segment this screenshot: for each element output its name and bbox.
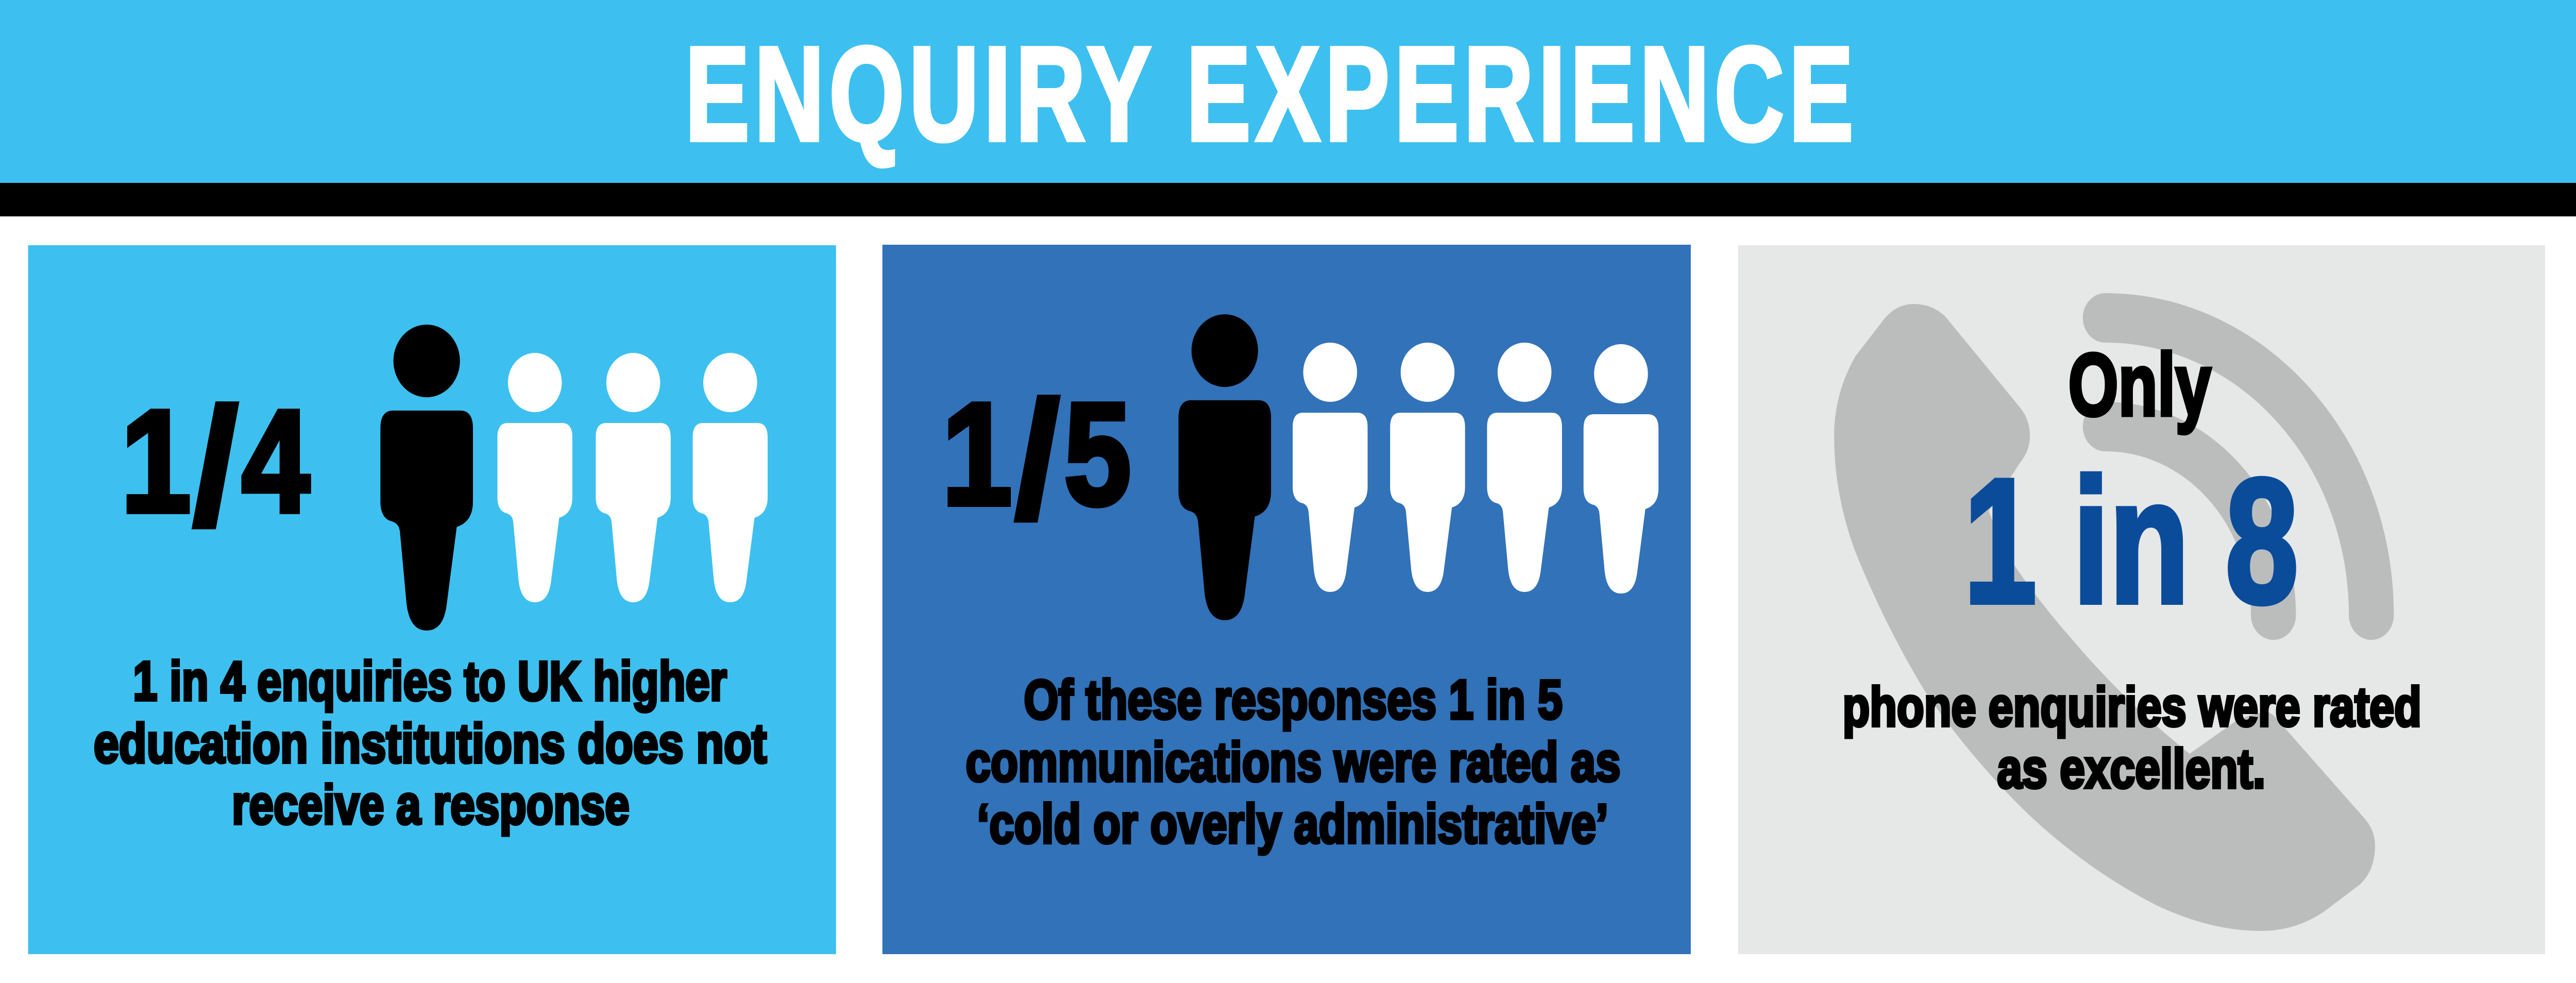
panel 1 caption: education institutions does not [94,713,767,774]
title: ENQUIRY EXPERIENCE [685,19,1858,168]
panel 1 caption: receive a response [232,774,630,836]
fraction 1/4: 4 [242,380,310,543]
panel 1 caption: 1 in 4 enquiries to UK higher [133,650,727,712]
fraction 1/4 [121,374,310,558]
panel 3 caption: as excellent. [1997,738,2265,800]
panel 2 caption: Of these responses 1 in 5 [1024,669,1563,731]
panel 3 caption [1842,676,2421,800]
panel: 1 in 5 communications [883,245,1691,954]
panel: 1 in 4 enquiries [28,245,836,954]
icon: row of people, one highlighted [1178,314,1658,620]
icon: telephone handset with signal arcs [1834,304,2375,931]
panel 2 caption: communications were rated as [966,731,1620,793]
panel 3 caption: phone enquiries were rated [1842,676,2421,738]
fraction 1/5: 1 [942,373,1012,536]
fraction 1/5: / [1015,367,1060,552]
big stat: 1 in 8: 1 in 8 [1964,442,2298,640]
label: Only: Only [2069,335,2211,434]
fraction 1/4: / [193,374,239,558]
fraction 1/5: 5 [1064,373,1131,536]
fraction 1/4: 1 [121,380,191,543]
panel 2 caption: ‘cold or overly administrative’ [977,793,1608,855]
black divider bar [0,183,2576,216]
panel: 1 in 8 phone enquiries [1738,245,2545,954]
fraction 1/5 [942,367,1131,552]
header band [0,0,2576,183]
icon: row of people, one highlighted [380,325,768,631]
panel 2 caption [966,669,1620,855]
panel 1 caption [94,650,767,836]
